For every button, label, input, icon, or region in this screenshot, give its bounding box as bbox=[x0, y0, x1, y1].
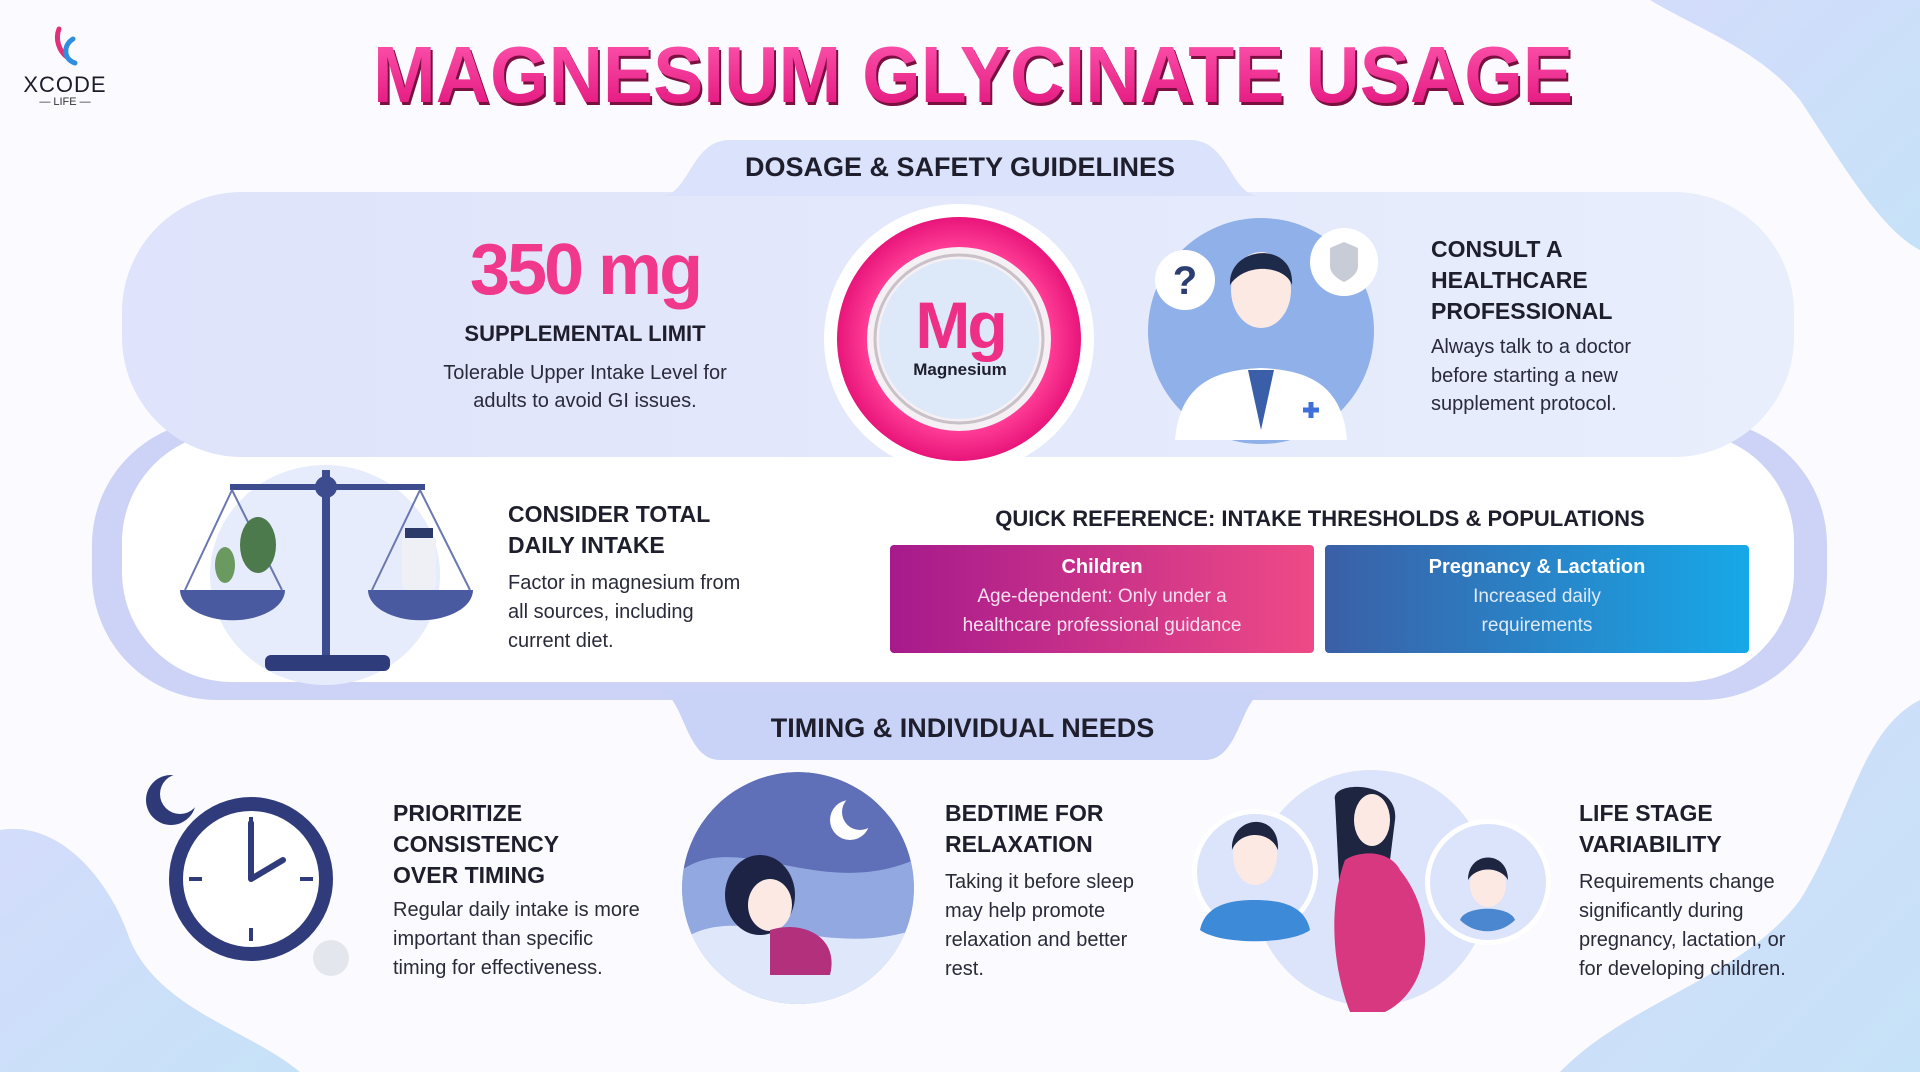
top band bbox=[122, 192, 1794, 457]
heading: timing: TIMING & INDIVIDUAL NEEDS bbox=[771, 713, 1154, 743]
children / pregnancy boxes bbox=[890, 545, 1314, 653]
timing tab bbox=[660, 690, 1265, 760]
family bbox=[1253, 770, 1489, 1006]
panel: bedtime: relaxation and better bbox=[945, 929, 1127, 951]
panel: life stage: significantly during bbox=[1579, 900, 1744, 922]
logo: — LIFE — bbox=[39, 96, 91, 108]
panel: consult: Always talk to a doctor bbox=[1431, 336, 1631, 358]
panel: life stage: Requirements change bbox=[1579, 871, 1775, 893]
panel: life stage bbox=[1579, 800, 1786, 980]
panel: bedtime: Taking it before sleep bbox=[945, 871, 1134, 893]
dosage tab bbox=[660, 140, 1260, 196]
heading: dosage & safety: DOSAGE & SAFETY GUIDELINES bbox=[745, 152, 1175, 182]
Mg circle bbox=[824, 204, 1094, 474]
logo bbox=[23, 26, 107, 108]
panel: life stage: VARIABILITY bbox=[1579, 831, 1722, 857]
panel: total intake: current diet. bbox=[508, 630, 614, 652]
box: pregnancy: requirements bbox=[1482, 615, 1592, 636]
box: children: Children bbox=[1061, 556, 1143, 578]
panel: life stage: for developing children. bbox=[1579, 958, 1786, 980]
panel: consult: HEALTHCARE bbox=[1431, 267, 1588, 293]
box: children: Age-dependent: Only under a bbox=[977, 586, 1227, 607]
panel: consistency: PRIORITIZE bbox=[393, 800, 522, 826]
corner blobs bbox=[1650, 0, 1920, 250]
panel: bedtime: rest. bbox=[945, 958, 984, 980]
scale bbox=[210, 465, 440, 685]
panel: consistency: important than specific bbox=[393, 928, 593, 950]
sleep circle bbox=[682, 772, 914, 1010]
panel: total intake bbox=[508, 501, 740, 652]
panel: total intake: Factor in magnesium from bbox=[508, 572, 740, 594]
panel: total intake: DAILY INTAKE bbox=[508, 532, 665, 558]
quick reference heading: QUICK REFERENCE: INTAKE THRESHOLDS & POPULATIONS bbox=[995, 506, 1645, 531]
panel: consistency bbox=[393, 800, 640, 979]
panel: consistency: Regular daily intake is more bbox=[393, 899, 640, 921]
panel: consistency: timing for effectiveness. bbox=[393, 957, 603, 979]
clock bbox=[146, 775, 196, 825]
panel: consistency: CONSISTENCY bbox=[393, 831, 559, 857]
panel: consult: before starting a new bbox=[1431, 364, 1618, 386]
panel: bedtime: BEDTIME FOR bbox=[945, 800, 1103, 826]
Mg label: Mg bbox=[915, 288, 1005, 362]
panel: bedtime bbox=[945, 800, 1134, 980]
panel: 350mg: 350 mg bbox=[470, 230, 700, 310]
box: pregnancy: Increased daily bbox=[1473, 586, 1601, 607]
logo: XCODE bbox=[23, 72, 107, 97]
panel: consult: supplement protocol. bbox=[1431, 393, 1617, 415]
panel: consult: PROFESSIONAL bbox=[1431, 298, 1612, 324]
panel: bedtime: may help promote bbox=[945, 900, 1105, 922]
panel: consult: CONSULT A bbox=[1431, 236, 1563, 262]
panel: 350mg bbox=[443, 230, 727, 412]
box: children bbox=[963, 556, 1241, 636]
box: pregnancy bbox=[1429, 556, 1645, 636]
box: children: healthcare professional guidance bbox=[963, 615, 1241, 636]
panel: bedtime: RELAXATION bbox=[945, 831, 1093, 857]
panel: consult bbox=[1431, 236, 1631, 415]
panel: 350mg: Tolerable Upper Intake Level for bbox=[443, 362, 727, 384]
panel: 350mg: adults to avoid GI issues. bbox=[473, 390, 697, 412]
middle panel border bbox=[92, 420, 1827, 700]
panel: life stage: LIFE STAGE bbox=[1579, 800, 1713, 826]
panel: total intake: CONSIDER TOTAL bbox=[508, 501, 710, 527]
background shapes: ? bbox=[1173, 259, 1197, 303]
panel: 350mg: SUPPLEMENTAL LIMIT bbox=[464, 321, 706, 346]
panel: total intake: all sources, including bbox=[508, 601, 694, 623]
Mg label: Magnesium bbox=[913, 360, 1007, 379]
panel: consistency: OVER TIMING bbox=[393, 862, 545, 888]
box: pregnancy: Pregnancy & Lactation bbox=[1429, 556, 1645, 578]
panel: life stage: pregnancy, lactation, or bbox=[1579, 929, 1785, 951]
doctor bbox=[1148, 218, 1374, 444]
